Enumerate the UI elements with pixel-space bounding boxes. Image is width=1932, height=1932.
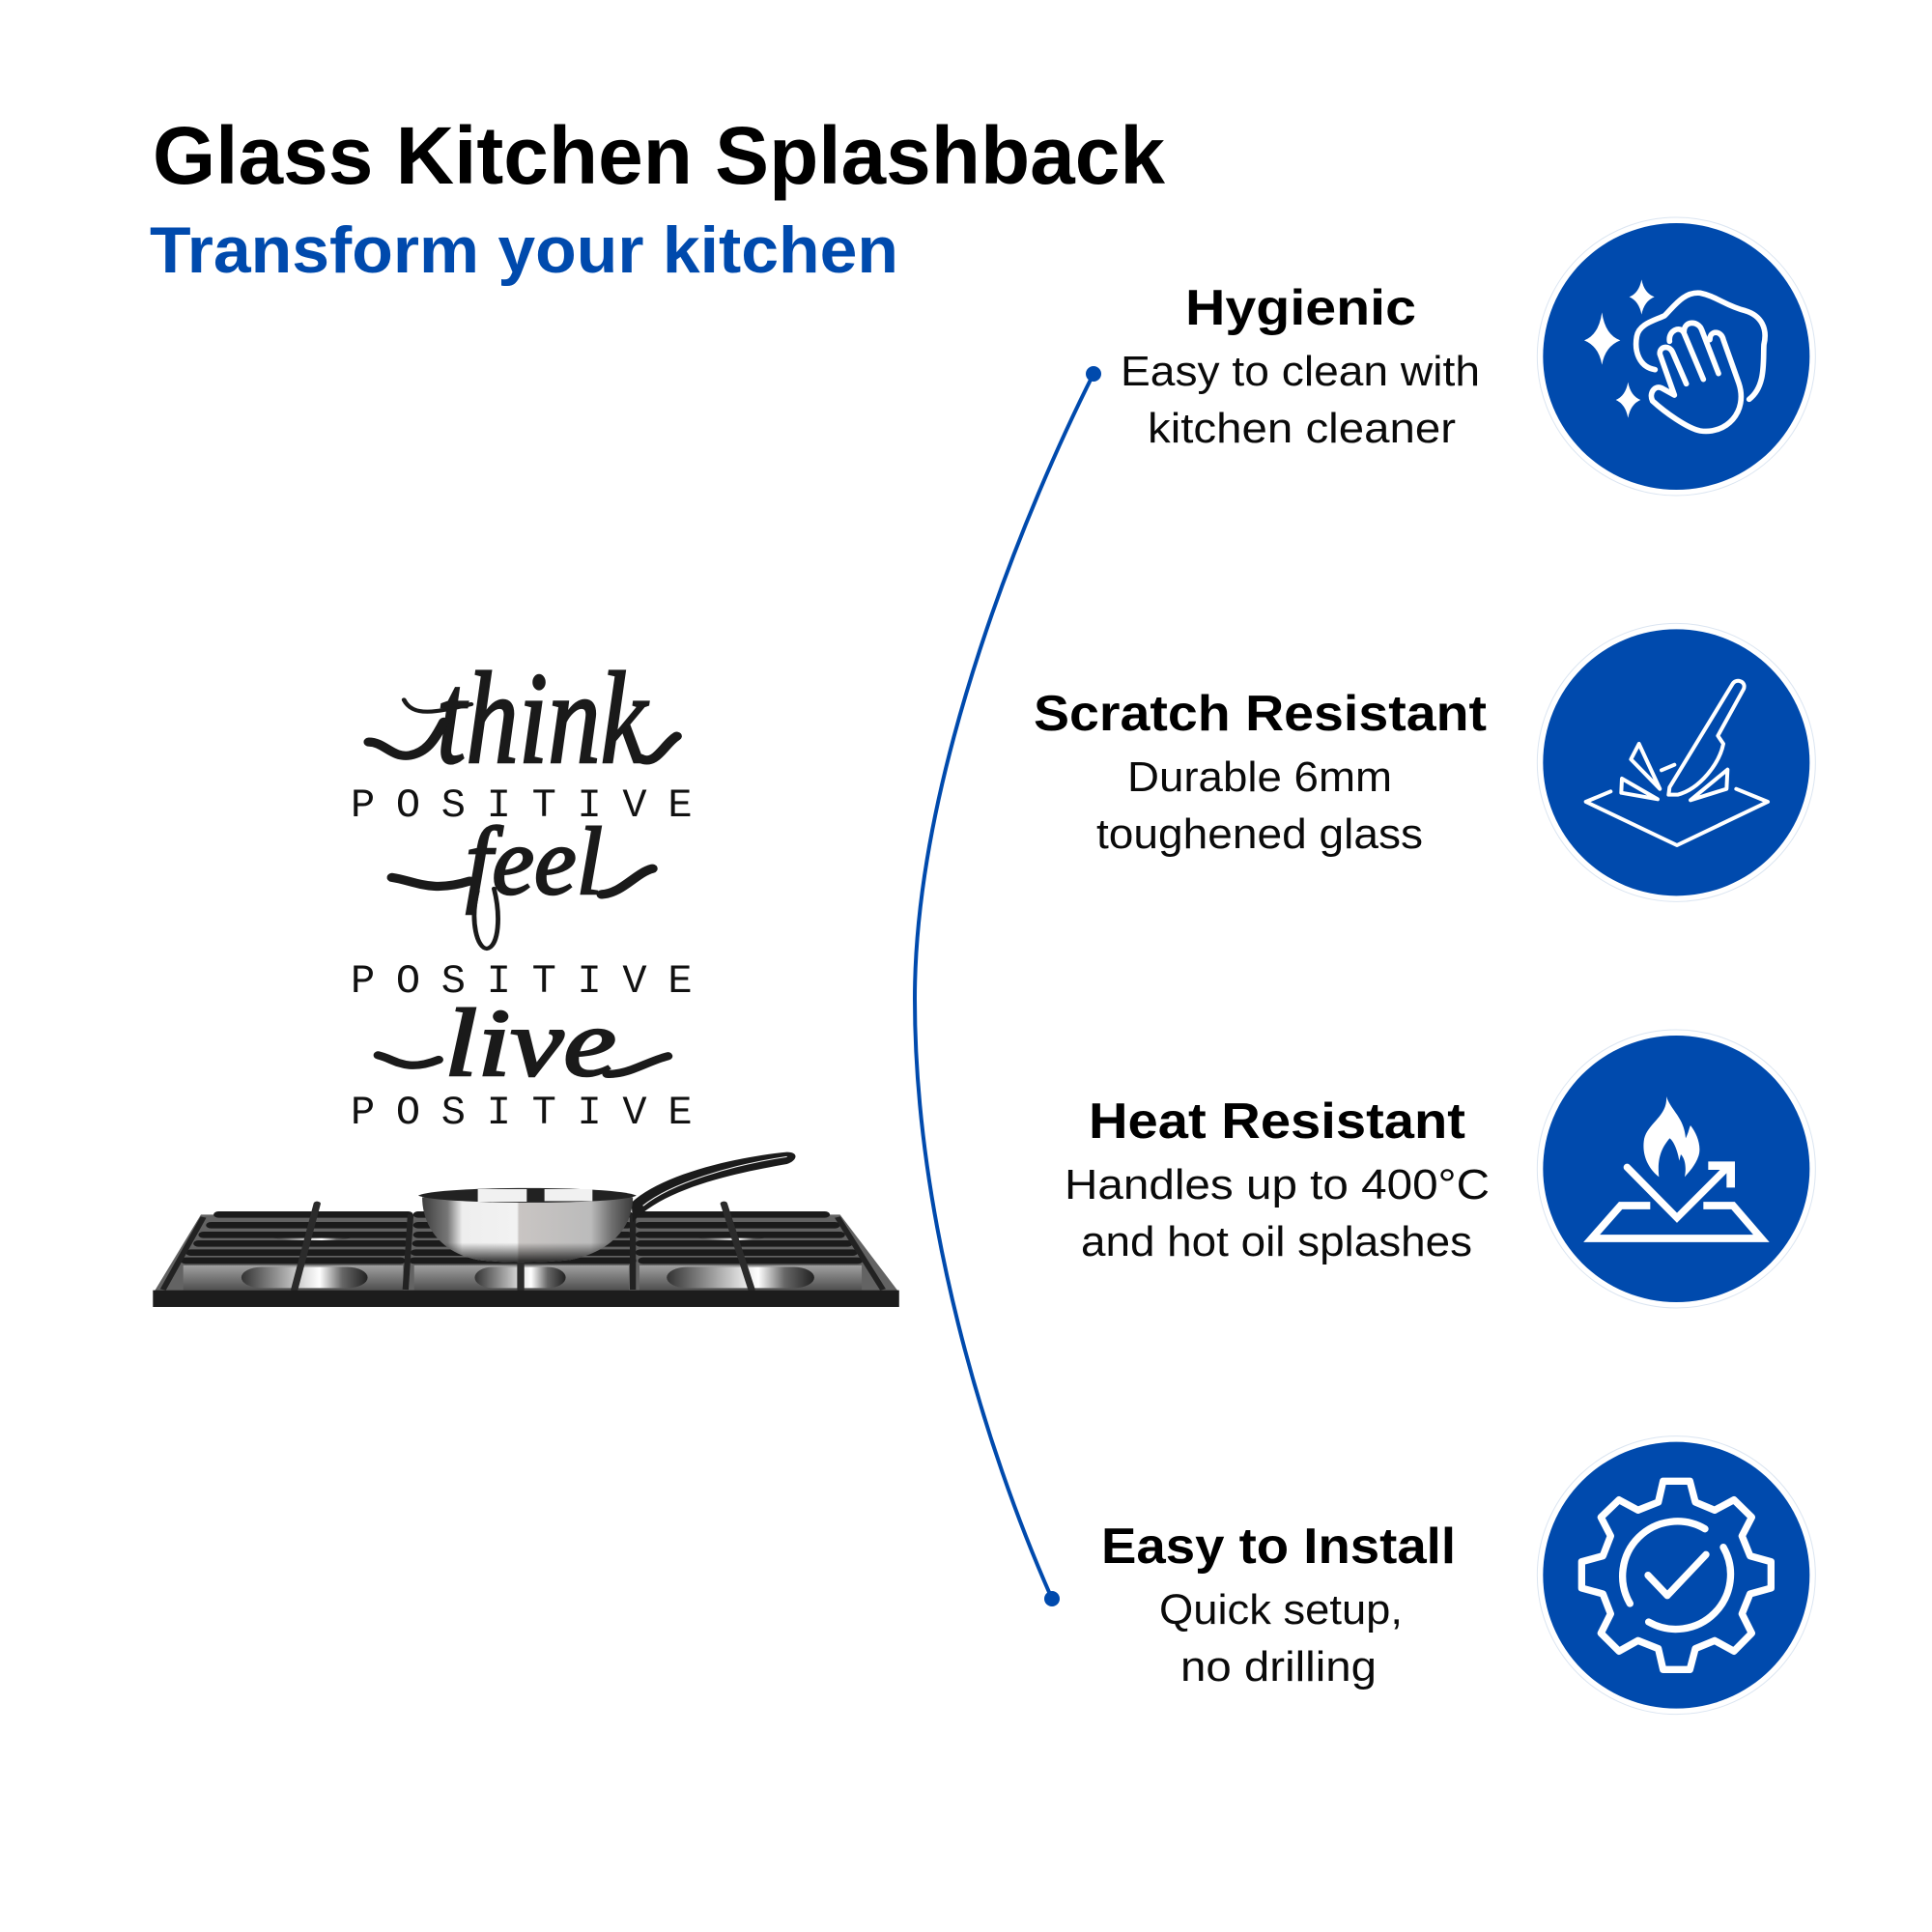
word: live: live [444,989,616,1096]
hob plate [155,1214,898,1292]
feature: easy to install [1101,1519,1456,1690]
description: no drilling [1180,1643,1377,1690]
description: Durable 6mm [1127,753,1392,801]
hob with pan [153,1152,899,1307]
description: and hot oil splashes [1081,1218,1472,1265]
feature: heat resistant [1065,1094,1490,1265]
description [1096,753,1423,858]
grates [185,1214,858,1261]
dot: bottom [1044,1591,1060,1606]
word: think: think [437,646,649,791]
description: kitchen cleaner [1148,405,1456,452]
icon: knife on glass [1537,623,1815,901]
text: positive line 3: POSITIVE [351,1090,713,1136]
heading: Scratch Resistant [1034,686,1487,742]
text: positive line 1: POSITIVE [351,782,713,829]
word: feel [392,808,652,949]
text: positive line 2: POSITIVE [351,958,713,1005]
word: feel: feel [466,808,603,915]
feature: scratch resistant [1034,686,1487,858]
connector arc [915,366,1101,1606]
description: Easy to clean with [1121,348,1480,395]
subtitle: Transform your kitchen [150,213,898,287]
description [1065,1161,1490,1265]
description: Handles up to 400°C [1065,1161,1490,1208]
feature: hygienic [1121,280,1480,452]
dot: top [1086,366,1101,382]
description [1159,1586,1403,1690]
title: Glass Kitchen Splashback [153,110,1165,201]
word: live [378,989,668,1096]
heading: Heat Resistant [1089,1094,1465,1150]
heading: Easy to Install [1101,1519,1456,1575]
pan handle [632,1152,796,1222]
icon: flame on glass [1537,1030,1815,1308]
icon: gear with check [1537,1436,1815,1715]
glass panels [184,1265,862,1290]
icon: hand wiping [1537,217,1815,496]
description: toughened glass [1096,810,1423,858]
heading: Hygienic [1185,280,1416,336]
description [1121,348,1480,452]
front edge [153,1291,899,1307]
description: Quick setup, [1159,1586,1403,1634]
pan body [418,1188,637,1263]
burners [242,1232,814,1288]
splashback artwork: think feel live positive [351,646,713,1136]
